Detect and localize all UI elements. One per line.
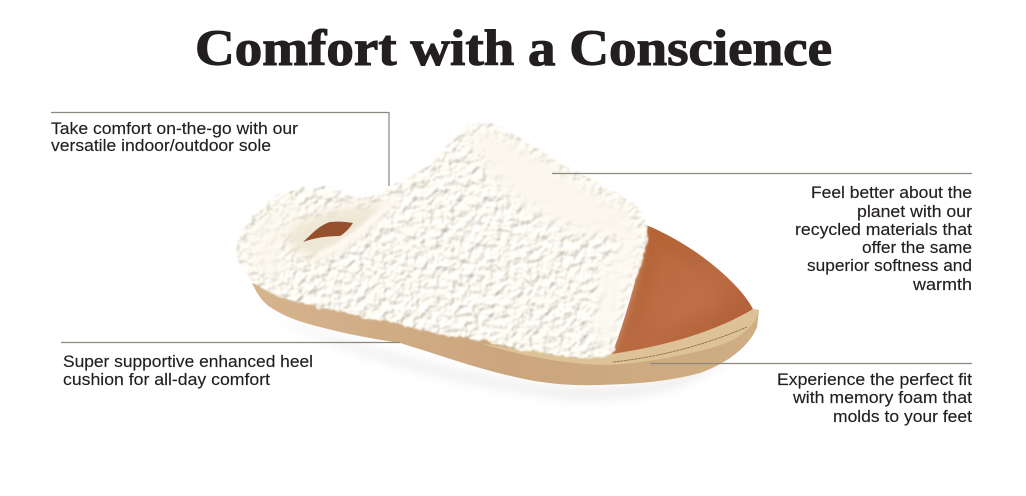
sole stitching bbox=[613, 327, 747, 362]
callout: heel cushion: Super supportive enhanced heel bbox=[63, 353, 313, 371]
callout: recycled materials: superior softness and bbox=[807, 257, 972, 275]
foot opening shade bbox=[285, 203, 392, 258]
sole bbox=[252, 283, 759, 385]
callout: recycled materials: warmth bbox=[912, 276, 972, 294]
callout: recycled materials: Feel better about the bbox=[811, 184, 972, 202]
callout: memory foam: with memory foam that bbox=[792, 389, 972, 407]
callout: memory foam: molds to your feet bbox=[833, 408, 972, 426]
sole rim bbox=[480, 309, 759, 365]
right edge highlight bbox=[593, 225, 640, 350]
callout: memory foam bbox=[650, 364, 972, 426]
callout: heel cushion bbox=[61, 342, 400, 389]
brand tag bbox=[303, 222, 353, 242]
callout: recycled materials bbox=[552, 174, 973, 294]
callout: heel cushion: cushion for all-day comfort bbox=[63, 371, 270, 389]
top highlight bbox=[470, 134, 636, 238]
slipper illustration bbox=[236, 123, 759, 396]
heel highlight bbox=[245, 200, 300, 285]
callout: recycled materials: recycled materials that bbox=[795, 221, 972, 239]
callout: recycled materials: planet with our bbox=[857, 203, 973, 221]
leather highlight bbox=[645, 250, 725, 327]
fleece body bbox=[236, 123, 647, 357]
title: Comfort with a Conscience bbox=[195, 21, 832, 77]
callout: outdoor sole: Take comfort on-the-go with our bbox=[51, 120, 299, 138]
callout: outdoor sole bbox=[51, 112, 389, 186]
leather toe bbox=[612, 225, 753, 354]
callout: recycled materials: offer the same bbox=[862, 239, 972, 257]
callout: memory foam: Experience the perfect fit bbox=[777, 371, 972, 389]
collar edge bbox=[318, 198, 396, 256]
callout: outdoor sole: versatile indoor/outdoor sole bbox=[51, 137, 271, 155]
shoe shadow bbox=[275, 316, 735, 396]
